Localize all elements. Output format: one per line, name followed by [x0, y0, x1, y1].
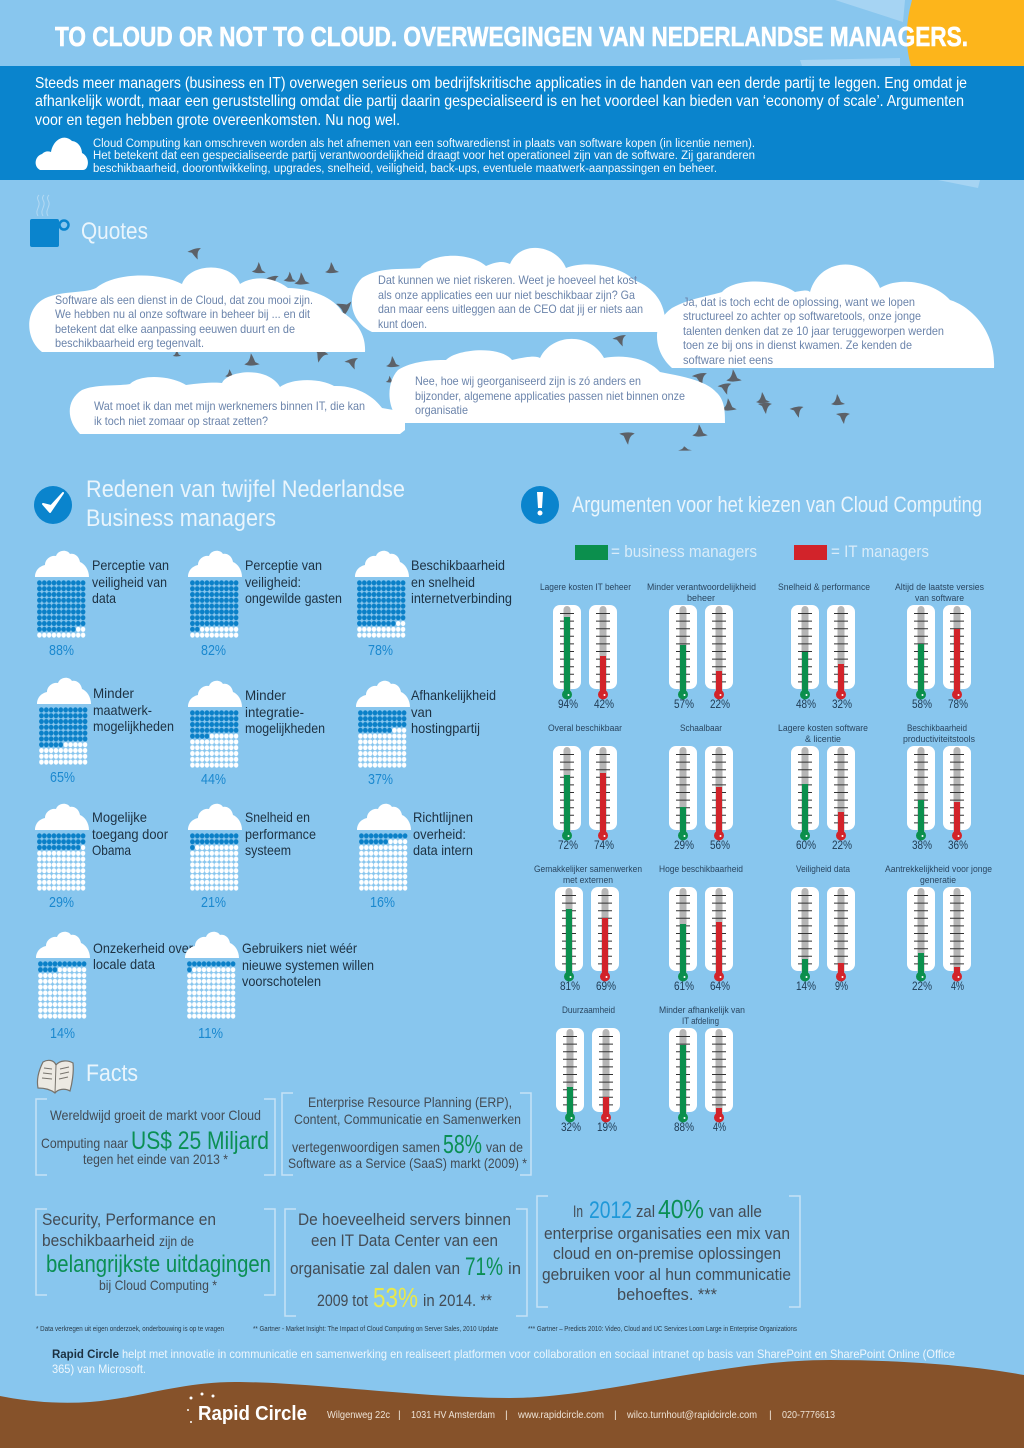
rain chart 11: 11%	[198, 1025, 223, 1042]
rain chart 11	[185, 932, 374, 1042]
rain chart 9: overheid:	[413, 826, 466, 842]
contact details: Wilgenweg 22c	[327, 1409, 390, 1421]
quote cloud 1: We hebben nu al onze software in beheer bij ... en dit	[55, 307, 311, 321]
rain chart 1: veiligheid van	[92, 574, 167, 590]
quote cloud 2	[352, 248, 665, 332]
fact box 3: beschikbaarheid	[42, 1231, 155, 1250]
fact box 5: In	[573, 1202, 583, 1221]
quote cloud 3: toen ze bij ons in dienst kwamen. Ze kenden de	[683, 338, 912, 352]
fact box 4: organisatie zal dalen van	[290, 1259, 460, 1278]
fact box 4: in	[508, 1259, 521, 1278]
thermometers: Snelheid & performance	[778, 582, 870, 711]
rain chart 9: Richtlijnen	[413, 809, 473, 825]
rain chart 8: 21%	[201, 894, 226, 911]
thermometers: Minder verantwoordelijkheid beheer	[647, 582, 756, 711]
logo: Rapid Circle: Rapid Circle	[198, 1403, 307, 1425]
fact box 5	[537, 1194, 800, 1307]
rain chart 7: toegang door	[92, 826, 168, 842]
thermometers: Gemakkelijker samenwerken met externen: Gemakkelijker samenwerken	[534, 864, 642, 874]
rain chart 9	[357, 804, 473, 911]
fact box 3: zijn de	[159, 1233, 194, 1249]
rain chart 10: 14%	[50, 1025, 75, 1042]
rain chart 5: Minder	[245, 687, 286, 703]
thermometers: Schaalbaar: 29%	[674, 838, 694, 852]
rain chart 1: Perceptie van	[92, 557, 169, 573]
quote cloud 1: betekent dat elke aanpassing eeuwen duurt en de	[55, 322, 295, 336]
fact box 5: cloud en on-premise oplossingen	[553, 1244, 781, 1263]
thermometers: Beschikbaarheid productiviteitstools: productiviteitstools	[903, 734, 975, 744]
about rapid circle: Rapid Circle	[52, 1347, 119, 1361]
rain chart 1: data	[92, 590, 116, 606]
intro text	[35, 75, 967, 129]
quote cloud 4	[389, 339, 725, 423]
fact box 2: Content, Communicatie en Samenwerken	[294, 1111, 521, 1127]
rain chart 3: internetverbinding	[411, 590, 512, 606]
rain chart 4: Minder	[93, 685, 134, 701]
rain chart 10: locale data	[93, 956, 155, 972]
thermometers: Minder verantwoordelijkheid beheer: 22%	[710, 697, 730, 711]
thermometers: Altijd de laatste versies van software: van software	[915, 593, 964, 603]
fact box 5: 40%	[658, 1194, 704, 1224]
logo: Rapid Circle	[187, 1392, 307, 1425]
thermometers: Aantrekkelijkheid voor jonge generatie: generatie	[920, 875, 956, 885]
fact box 4: 2009 tot	[317, 1291, 368, 1310]
contact details: |	[505, 1409, 508, 1421]
quote cloud 2: dan maar eens uitleggen aan de CEO dat jij er niets aan	[378, 302, 643, 316]
thermometers: Minder afhankelijk van IT afdeling: 88%	[674, 1120, 694, 1134]
rain chart 5: 44%	[201, 771, 226, 788]
cloud computing definition: beschikbaarheid, doorontwikkeling, upgrades, snelheid, veiligheid, back-ups, eventuele maatwerk-aanpassingen en beheer.	[93, 163, 717, 175]
contact details	[327, 1409, 835, 1421]
contact details: wilco.turnhout@rapidcircle.com	[626, 1409, 757, 1421]
quote cloud 3: Ja, dat is toch echt de oplossing, want we lopen	[683, 295, 915, 309]
thermometers: Gemakkelijker samenwerken met externen: 69%	[596, 979, 616, 993]
fact box 3: Security, Performance en	[42, 1210, 216, 1229]
fact box 5: zal	[636, 1202, 655, 1221]
fact box 2: vertegenwoordigen samen	[292, 1139, 440, 1155]
quote cloud 2: als onze applicaties een uur niet beschikbaar zijn? Ga	[378, 288, 635, 302]
heading: redenen van twijfel	[86, 476, 405, 532]
rain chart 9: data intern	[413, 842, 473, 858]
rain chart 4: mogelijkheden	[93, 718, 174, 734]
thermometers: Schaalbaar: 56%	[710, 838, 730, 852]
quote cloud 5	[70, 372, 405, 434]
thermometers: Veiligheid data: 9%	[835, 979, 848, 993]
fact box 2: Software as a Service (SaaS) markt (2009) *	[288, 1155, 527, 1171]
intro text: voor en tegen hebben grote overeenkomsten. Nu nog wel.	[35, 112, 400, 129]
thermometers: Aantrekkelijkheid voor jonge generatie: Aantrekkelijkheid voor jonge	[885, 864, 992, 874]
fact box 3: belangrijkste uitdagingen	[46, 1251, 271, 1278]
thermometers: Beschikbaarheid productiviteitstools	[903, 723, 975, 852]
rain chart 9: 16%	[370, 894, 395, 911]
quote cloud 4: Nee, hoe wij georganiseerd zijn is zó anders en	[415, 374, 641, 388]
thermometers: Minder afhankelijk van IT afdeling: IT afdeling	[682, 1016, 719, 1026]
thermometers: Beschikbaarheid productiviteitstools: 38%	[912, 838, 932, 852]
thermometers: Duurzaamheid	[556, 1005, 620, 1134]
rain chart 6	[356, 681, 496, 788]
thermometers: Altijd de laatste versies van software: 78%	[948, 697, 968, 711]
thermometers: Veiligheid data	[791, 864, 855, 993]
heading: facts: Facts	[86, 1060, 138, 1087]
thermometers: Overal beschikbaar: 74%	[594, 838, 614, 852]
thermometers: Overal beschikbaar: Overal beschikbaar	[548, 723, 622, 733]
rain chart 3: Beschikbaarheid	[411, 557, 505, 573]
thermometers: Minder verantwoordelijkheid beheer: 57%	[674, 697, 694, 711]
rain chart 7: Mogelijke	[92, 809, 147, 825]
cloud computing definition: Het betekent dat een gespecialiseerde partij verantwoordelijkheid draagt voor het operationeel zijn van de software. Zij garanderen	[93, 150, 755, 162]
rain chart 4	[37, 678, 174, 786]
about rapid circle	[52, 1347, 955, 1376]
thermometers: Duurzaamheid: 32%	[561, 1120, 581, 1134]
quote cloud 4: bijzonder, algemene applicaties passen niet binnen onze	[415, 389, 685, 403]
footnotes: * Data verkregen uit eigen onderzoek, onderbouwing is op te vragen	[36, 1326, 224, 1333]
fact box 1: tegen het einde van 2013 *	[83, 1151, 228, 1167]
thermometers: Lagere kosten software & licentie: 60%	[796, 838, 816, 852]
rain chart 11: nieuwe systemen willen	[242, 957, 374, 973]
fact box 5: van alle	[709, 1202, 762, 1221]
fact box 4: 71%	[465, 1253, 503, 1281]
rain chart 1: 88%	[49, 642, 74, 659]
rain chart 11: Gebruikers niet wéér	[242, 940, 357, 956]
fact box 5: 2012	[589, 1197, 632, 1224]
heading: quotes: Quotes	[81, 218, 148, 245]
rain chart 2	[188, 551, 342, 659]
thermometers: Aantrekkelijkheid voor jonge generatie: 4%	[951, 979, 964, 993]
thermometers: Lagere kosten IT beheer	[540, 582, 631, 711]
rain chart 4: maatwerk-	[93, 702, 152, 718]
about rapid circle: helpt met innovatie in communicatie en samenwerking en realiseert platformen voor collaboration en sociaal intranet op basis van SharePoint en SharePoint Online (Office	[122, 1347, 955, 1361]
contact details: |	[614, 1409, 617, 1421]
quote cloud 3	[657, 264, 994, 368]
fact box 2: 58%	[443, 1129, 482, 1159]
thermometers: Minder verantwoordelijkheid beheer: beheer	[687, 593, 715, 603]
rain chart 3	[355, 551, 512, 659]
thermometers: Lagere kosten IT beheer: Lagere kosten IT beheer	[540, 582, 631, 592]
thermometers: Snelheid & performance: 32%	[832, 697, 852, 711]
thermometers: Minder afhankelijk van IT afdeling	[659, 1005, 745, 1134]
thermometers: Minder afhankelijk van IT afdeling: 4%	[713, 1120, 726, 1134]
thermometers: Veiligheid data: Veiligheid data	[796, 864, 850, 874]
thermometers: Hoge beschikbaarheid: 61%	[674, 979, 694, 993]
rain chart 4: 65%	[50, 769, 75, 786]
cloud computing definition	[93, 138, 755, 175]
rain chart 2: Perceptie van	[245, 557, 322, 573]
thermometers: Overal beschikbaar	[548, 723, 622, 852]
thermometers: Duurzaamheid: 19%	[597, 1120, 617, 1134]
fact box 5: enterprise organisaties een mix van	[544, 1224, 790, 1243]
thermometers: Beschikbaarheid productiviteitstools: Beschikbaarheid	[907, 723, 967, 733]
legend: = business managers	[611, 542, 757, 561]
quote cloud 3: talenten denken dat ze 10 jaar teruggeworpen werden	[683, 324, 944, 338]
about rapid circle: 365) van Microsoft.	[52, 1362, 146, 1376]
heading: redenen van twijfel: Business managers	[86, 505, 276, 532]
rain chart 11: voorschotelen	[242, 973, 321, 989]
heading: redenen van twijfel: Redenen van twijfel Nederlandse	[86, 476, 405, 503]
rain chart 7	[35, 804, 168, 911]
fact box 4: een IT Data Center van een	[311, 1231, 498, 1250]
icon: coffee cup	[30, 195, 68, 247]
rain chart 5: integratie-	[245, 704, 304, 720]
footnotes	[36, 1326, 797, 1333]
contact details: 1031 HV Amsterdam	[411, 1409, 495, 1421]
fact box 4: 53%	[373, 1282, 418, 1313]
thermometers: Snelheid & performance: Snelheid & performance	[778, 582, 870, 592]
fact box 4	[285, 1209, 527, 1316]
rain chart 10	[36, 932, 193, 1042]
quote cloud 2: kunt doen.	[378, 317, 427, 331]
icon: exclamation mark	[521, 486, 559, 524]
fact box 2: van de	[486, 1139, 523, 1155]
thermometers: Altijd de laatste versies van software: Altijd de laatste versies	[895, 582, 984, 592]
fact box 3	[36, 1209, 275, 1295]
thermometers: Duurzaamheid: Duurzaamheid	[562, 1005, 615, 1015]
quote cloud 3: structureel zo achter op softwaretools, onze jonge	[683, 309, 921, 323]
thermometers: Minder afhankelijk van IT afdeling: Minder afhankelijk van	[659, 1005, 745, 1015]
rain chart 8	[188, 804, 316, 911]
rain chart 3: 78%	[368, 642, 393, 659]
fact box 5: behoeftes. ***	[617, 1285, 717, 1304]
thermometers: Altijd de laatste versies van software	[895, 582, 984, 711]
contact details: |	[398, 1409, 401, 1421]
fact box 2	[282, 1093, 531, 1175]
thermometers: Minder verantwoordelijkheid beheer: Minder verantwoordelijkheid	[647, 582, 756, 592]
quote cloud 1: Software als een dienst in de Cloud, dat zou mooi zijn.	[55, 293, 313, 307]
quote cloud 2: Dat kunnen we niet riskeren. Weet je hoeveel het kost	[378, 273, 638, 287]
fact box 3: bij Cloud Computing *	[99, 1277, 217, 1293]
rain chart 2: 82%	[201, 642, 226, 659]
thermometers: Schaalbaar: Schaalbaar	[680, 723, 722, 733]
rain chart 10: Onzekerheid over	[93, 940, 193, 956]
contact details: |	[769, 1409, 772, 1421]
thermometers: Schaalbaar	[669, 723, 733, 852]
fact box 4: De hoeveelheid servers binnen	[298, 1210, 511, 1229]
rain chart 1	[35, 551, 169, 659]
footnotes: *** Gartner – Predicts 2010: Video, Cloud and UC Services Loom Large in Enterprise Organizations	[528, 1326, 797, 1333]
rain chart 2: ongewilde gasten	[245, 590, 342, 606]
fact box 1: Computing naar	[41, 1135, 128, 1151]
footer wave	[0, 1360, 1024, 1448]
fact box 2: Enterprise Resource Planning (ERP),	[308, 1094, 512, 1110]
thermometers: Hoge beschikbaarheid: 64%	[710, 979, 730, 993]
thermometers: Lagere kosten software & licentie: Lagere kosten software	[778, 723, 868, 733]
birds	[173, 247, 850, 451]
thermometers: Gemakkelijker samenwerken met externen	[534, 864, 642, 993]
thermometers: Aantrekkelijkheid voor jonge generatie: 22%	[912, 979, 932, 993]
thermometers: Lagere kosten software & licentie: & licentie	[805, 734, 841, 744]
thermometers: Snelheid & performance: 48%	[796, 697, 816, 711]
rain chart 3: en snelheid	[411, 574, 475, 590]
quote cloud 4: organisatie	[415, 403, 468, 417]
thermometers: Hoge beschikbaarheid	[659, 864, 743, 993]
icon: book	[37, 1060, 73, 1093]
rain chart 6: hostingpartij	[411, 720, 480, 736]
rain chart 7: 29%	[49, 894, 74, 911]
quote cloud 5: Wat moet ik dan met mijn werknemers binnen IT, die kan	[94, 399, 365, 413]
rain chart 2: veiligheid:	[245, 574, 301, 590]
thermometers: Aantrekkelijkheid voor jonge generatie	[885, 864, 992, 993]
thermometers: Lagere kosten software & licentie: 22%	[832, 838, 852, 852]
fact box 1	[36, 1099, 275, 1175]
rain chart 6: 37%	[368, 771, 393, 788]
footnotes: ** Gartner - Market Insight: The Impact of Cloud Computing on Server Sales, 2010 Update	[253, 1326, 498, 1333]
thermometers: Beschikbaarheid productiviteitstools: 36%	[948, 838, 968, 852]
panel: intro band	[0, 66, 1024, 180]
rain chart 6: Afhankelijkheid	[411, 687, 496, 703]
thermometers: Lagere kosten IT beheer: 42%	[594, 697, 614, 711]
thermometers: Lagere kosten software & licentie	[778, 723, 868, 852]
contact details: www.rapidcircle.com	[517, 1409, 604, 1421]
quote cloud 3: software niet eens	[683, 353, 773, 367]
thermometers: Gemakkelijker samenwerken met externen: 81%	[560, 979, 580, 993]
thermometers: Veiligheid data: 14%	[796, 979, 816, 993]
sun and light rays	[800, 0, 1024, 188]
thermometers: Overal beschikbaar: 72%	[558, 838, 578, 852]
legend: = IT managers	[831, 542, 929, 561]
rain chart 6: van	[411, 704, 432, 720]
rain chart 5: mogelijkheden	[245, 720, 325, 736]
fact box 4: in 2014. **	[423, 1291, 492, 1310]
fact box 1: Wereldwijd groeit de markt voor Cloud	[50, 1107, 261, 1123]
rain chart 8: systeem	[245, 842, 291, 858]
thermometers: Lagere kosten IT beheer: 94%	[558, 697, 578, 711]
quote cloud 1: beschikbaarheid erg tegenvalt.	[55, 336, 204, 350]
contact details: 020-7776613	[782, 1409, 835, 1421]
thermometers: Hoge beschikbaarheid: Hoge beschikbaarheid	[659, 864, 743, 874]
quote cloud 1	[29, 268, 365, 352]
legend	[575, 542, 929, 561]
rain chart 7: Obama	[92, 842, 131, 858]
rain chart 8: performance	[245, 826, 316, 842]
icon: cloud	[36, 138, 88, 170]
quote cloud 5: ik toch niet zomaar op straat zetten?	[94, 414, 268, 428]
rain chart 5	[188, 681, 325, 788]
rain chart 8: Snelheid en	[245, 809, 310, 825]
thermometers: Altijd de laatste versies van software: 58%	[912, 697, 932, 711]
icon: check mark	[34, 486, 72, 524]
thermometers: Gemakkelijker samenwerken met externen: met externen	[563, 875, 613, 885]
fact box 1: US$ 25 Miljard	[131, 1127, 269, 1155]
fact box 5: gebruiken voor al hun communicatie	[542, 1265, 791, 1284]
cloud computing definition: Cloud Computing kan omschreven worden als het afnemen van een softwaredienst in plaats van software kopen (in licentie nemen).	[93, 138, 755, 150]
